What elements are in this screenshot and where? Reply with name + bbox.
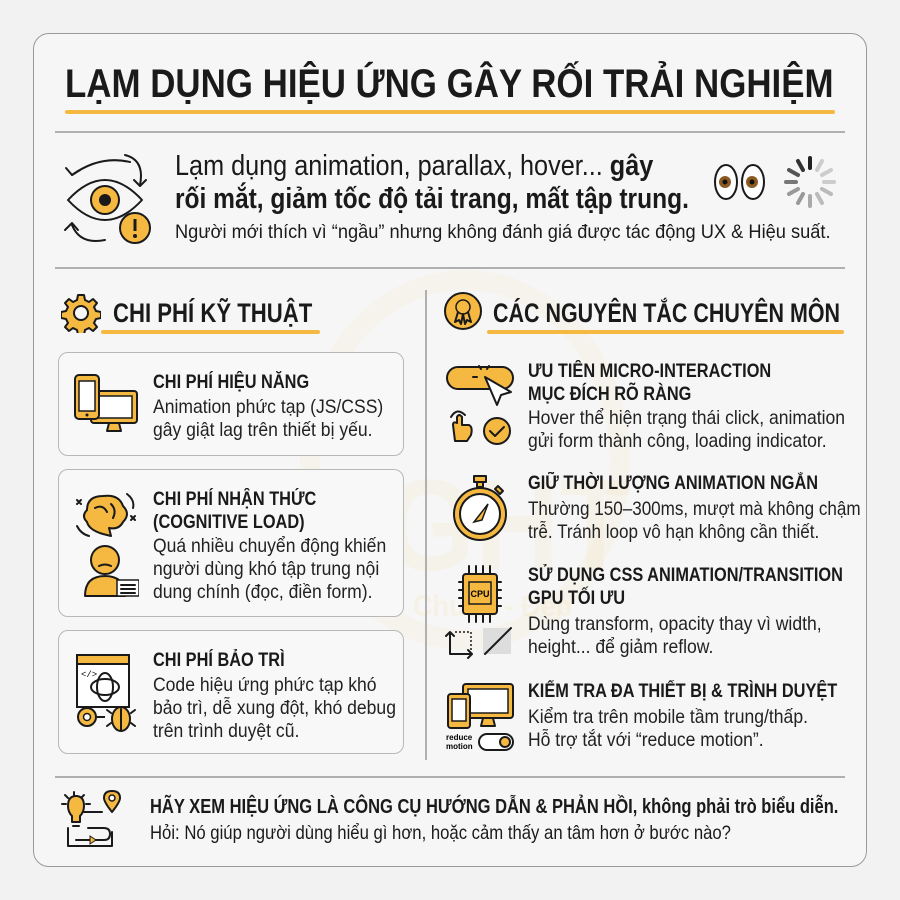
item: test devices: Kiểm tra trên mobile tầm trung/thấp. xyxy=(528,706,808,728)
panel: left technical costs xyxy=(61,294,320,334)
item: CSS GPU: Dùng transform, opacity thay vì width, xyxy=(528,613,822,635)
item: short duration: trễ. Tránh loop vô hạn không cần thiết. xyxy=(528,521,819,543)
panel: right principles xyxy=(444,292,844,334)
heading: Các nguyên tắc chuyên môn xyxy=(444,292,844,334)
item: micro-interaction: Hover thể hiện trạng thái click, animation xyxy=(528,407,845,429)
box: chi phí bảo trì: </> xyxy=(81,670,97,680)
intro section: Người mới thích vì “ngầu” nhưng không đánh giá được tác động UX & Hiệu suất. xyxy=(175,222,831,243)
item: short duration: Thường 150–300ms, mượt mà không chậm xyxy=(528,498,861,520)
icon: loading spinner xyxy=(784,156,836,208)
item: micro-interaction: ƯU TIÊN MICRO-INTERACTION xyxy=(528,361,771,382)
box: chi phí bảo trì xyxy=(58,630,404,754)
item: CSS GPU: height... để giảm reflow. xyxy=(528,636,713,658)
item: test devices: Hỗ trợ tắt với “reduce motion”. xyxy=(528,729,764,751)
item: micro-interaction: MỤC ĐÍCH RÕ RÀNG xyxy=(528,384,691,405)
box: chi phí nhận thức: Quá nhiều chuyển động khiến xyxy=(153,535,386,557)
icon: eye with warning xyxy=(64,154,151,244)
icon: eyes xyxy=(714,164,765,200)
text: Nhanh - Chuẩn - Đẹp xyxy=(305,590,572,623)
box: chi phí bảo trì: bảo trì, dễ xung đột, khó debug xyxy=(153,697,396,719)
item: CSS GPU: GPU TỐI ƯU xyxy=(528,588,625,609)
intro section: rối mắt, giảm tốc độ tải trang, mất tập trung. xyxy=(175,183,689,215)
item: short duration: GIỮ THỜI LƯỢNG ANIMATION NGẮN xyxy=(528,473,818,494)
item: CSS GPU: SỬ DỤNG CSS ANIMATION/TRANSITION xyxy=(528,565,843,586)
item: test devices xyxy=(446,680,838,751)
intro text: Lạm dụng animation, parallax, hover... gây xyxy=(175,150,653,182)
item: test devices: reduce xyxy=(446,733,473,742)
watermark xyxy=(300,270,630,650)
item: micro-interaction: gửi form thành công, loading indicator. xyxy=(528,430,827,452)
footer: HÃY XEM HIỆU ỨNG LÀ CÔNG CỤ HƯỚNG DẪN & PHẢN HỒI, không phải trò biểu diễn. xyxy=(150,795,838,818)
intro section xyxy=(64,150,836,244)
box: chi phí nhận thức: (COGNITIVE LOAD) xyxy=(153,512,305,533)
box: chi phí bảo trì: trên trình duyệt cũ. xyxy=(153,720,299,742)
title: LẠM DỤNG HIỆU ỨNG GÂY RỐI TRẢI NGHIỆM xyxy=(65,62,834,106)
heading: Các nguyên tắc chuyên môn: CÁC NGUYÊN TẮC CHUYÊN MÔN xyxy=(493,298,840,328)
box: chi phí bảo trì: CHI PHÍ BẢO TRÌ xyxy=(153,650,285,671)
heading: Chi phí kỹ thuật xyxy=(61,294,320,334)
item: micro-interaction xyxy=(446,360,845,452)
item: test devices: KIỂM TRA ĐA THIẾT BỊ & TRÌNH DUYỆT xyxy=(528,681,837,702)
text: LIGHT xyxy=(280,452,631,598)
box: chi phí nhận thức xyxy=(58,469,404,617)
box: chi phí nhận thức: người dùng khó tập trung nội xyxy=(153,558,379,580)
item: CSS GPU: CPU xyxy=(470,589,490,599)
box: chi phí hiệu năng xyxy=(58,352,404,456)
box: chi phí bảo trì: Code hiệu ứng phức tạp khó xyxy=(153,674,377,696)
icon: idea to location path xyxy=(61,790,121,847)
item: CSS GPU xyxy=(445,564,843,659)
box: chi phí nhận thức: CHI PHÍ NHẬN THỨC xyxy=(153,489,316,510)
heading: Chi phí kỹ thuật: CHI PHÍ KỸ THUẬT xyxy=(113,298,312,328)
item: test devices: motion xyxy=(446,742,473,751)
box: chi phí hiệu năng: gây giật lag trên thiết bị yếu. xyxy=(153,419,373,441)
box: chi phí hiệu năng: CHI PHÍ HIỆU NĂNG xyxy=(153,372,309,393)
box: chi phí nhận thức: dung chính (đọc, điền form). xyxy=(153,581,373,603)
footer: Hỏi: Nó giúp người dùng hiểu gì hơn, hoặc cảm thấy an tâm hơn ở bước nào? xyxy=(150,822,731,844)
item: short duration xyxy=(453,472,861,543)
box: chi phí hiệu năng: Animation phức tạp (JS/CSS) xyxy=(153,396,383,418)
footer xyxy=(61,790,838,847)
